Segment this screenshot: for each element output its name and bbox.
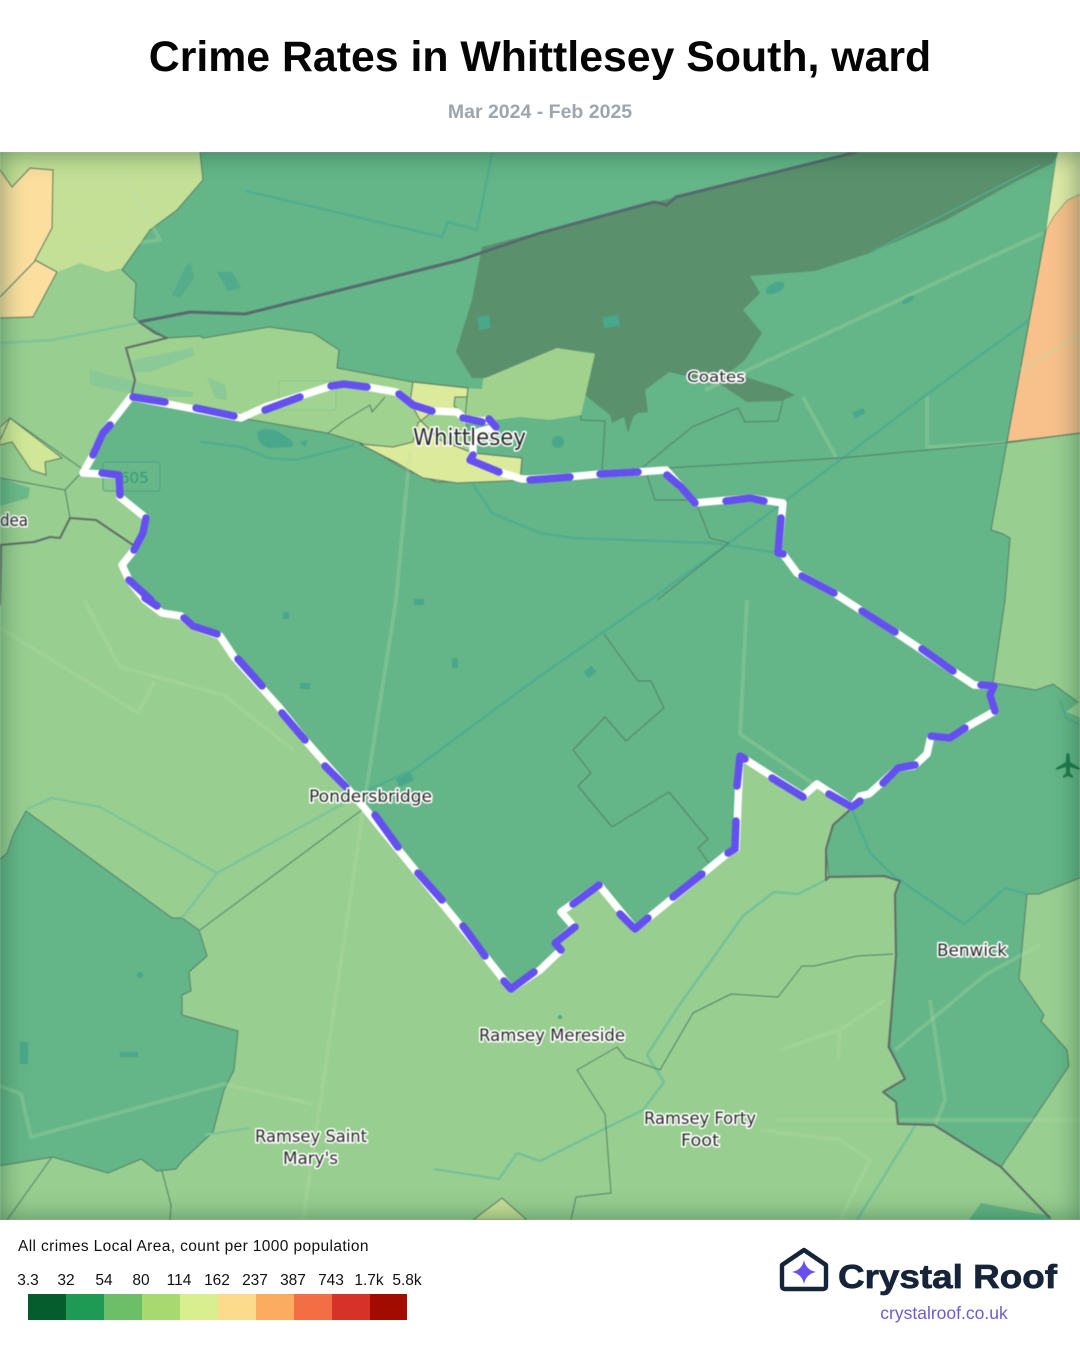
area: yellow-green north-west xyxy=(0,152,203,272)
legend tick labels: 54 xyxy=(95,1272,113,1289)
legend title: All crimes Local Area, count per 1000 population xyxy=(18,1238,369,1255)
map edge vignette xyxy=(0,152,1080,1220)
icon: purple star xyxy=(792,1260,816,1284)
website url: crystalroof.co.uk xyxy=(880,1303,1008,1323)
icon: house outline xyxy=(782,1250,826,1289)
legend colour bar xyxy=(28,1294,407,1320)
label: Ramsey Forty Foot: Ramsey Forty xyxy=(644,1109,756,1129)
area: darker patch west xyxy=(0,478,30,506)
label: Benwick: Benwick xyxy=(937,941,1007,961)
legend tick labels: 80 xyxy=(132,1272,150,1289)
label: Ramsey Saint Mary's: Mary's xyxy=(283,1149,338,1169)
legend scale xyxy=(17,1272,422,1320)
road shield A605 xyxy=(103,462,160,491)
area: light green strip west of Whittlesey xyxy=(126,327,522,482)
road shield A605 upper xyxy=(279,381,336,410)
legend tick labels: 5.8k xyxy=(392,1272,422,1289)
railway line xyxy=(139,152,857,322)
legend tick labels: 162 xyxy=(204,1272,230,1289)
area: mid green south-east corner xyxy=(969,1203,1052,1220)
area: yellow centre of Whittlesey xyxy=(360,382,522,483)
label: Coates: Coates xyxy=(687,368,745,386)
legend tick labels: 237 xyxy=(242,1272,268,1289)
legend tick labels: 743 xyxy=(318,1272,344,1289)
legend tick labels: 32 xyxy=(57,1272,75,1289)
label: Ramsey Forty Foot xyxy=(644,1109,756,1151)
area: small yellow triangle south xyxy=(473,1198,527,1220)
ward boundary: purple dashes xyxy=(93,384,995,989)
legend tick labels: 387 xyxy=(280,1272,306,1289)
area: mid green south-west xyxy=(0,811,238,1173)
legend tick labels xyxy=(17,1272,422,1289)
legend tick labels: 1.7k xyxy=(354,1272,384,1289)
label: Ramsey Saint Mary's: Ramsey Saint xyxy=(255,1127,367,1147)
legend tick labels: 114 xyxy=(167,1272,191,1289)
area: mid green ward and surrounds xyxy=(83,152,1080,1167)
area: peach north-west xyxy=(0,167,57,318)
light roads xyxy=(0,167,1080,1220)
pale ponds in strip west of Whittlesey xyxy=(90,348,227,400)
logo: Crystal Roof xyxy=(780,1248,1058,1296)
thin ward and parish boundaries xyxy=(0,260,1080,1220)
label: Ramsey Saint Mary's xyxy=(255,1127,367,1169)
label: dea: dea xyxy=(0,511,28,531)
subtitle: date range: Mar 2024 - Feb 2025 xyxy=(448,101,632,123)
thick district boundaries xyxy=(0,322,1050,1218)
ward boundary: white base line xyxy=(83,384,995,989)
label: Ramsey Mereside: Ramsey Mereside xyxy=(479,1026,625,1046)
label: Whittlesey: Whittlesey xyxy=(413,425,526,451)
area: light patch far east xyxy=(1066,700,1080,718)
legend tick labels: 3.3 xyxy=(17,1272,39,1289)
label: Ramsey Forty Foot: Foot xyxy=(681,1131,719,1151)
area: light green north of Whittlesey xyxy=(465,348,595,421)
icon: airplane xyxy=(1056,753,1080,778)
area: dark green north xyxy=(456,152,1058,433)
wordmark: Crystal Roof xyxy=(838,1258,1058,1295)
place labels xyxy=(0,368,1007,1169)
choropleth map panel xyxy=(0,152,1080,1220)
title: Crime Rates in Whittlesey South, ward xyxy=(149,33,931,81)
label: Pondersbridge: Pondersbridge xyxy=(309,787,432,807)
area: peach east xyxy=(1007,193,1080,442)
ponds and buildings xyxy=(20,262,915,1064)
area: pale yellow east sliver xyxy=(1046,152,1080,230)
water channels xyxy=(0,153,1080,1220)
road shield A605: 605 xyxy=(120,469,149,487)
area: yellow-green fringe west xyxy=(0,418,62,475)
